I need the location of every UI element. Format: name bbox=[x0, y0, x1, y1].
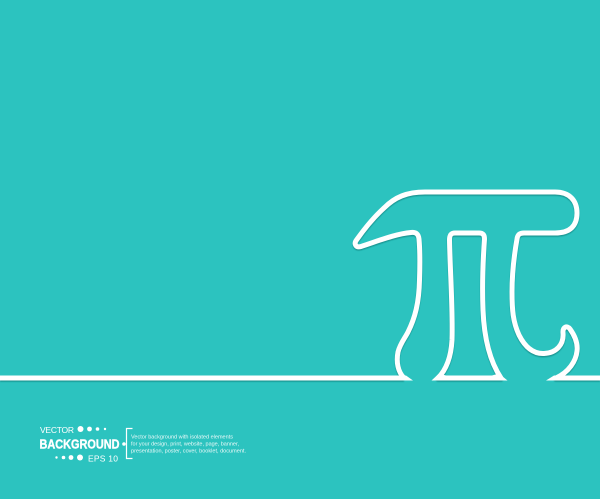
dots row bottom bbox=[55, 454, 83, 460]
description text: presentation, poster, cover, booklet, document. bbox=[131, 448, 246, 454]
tapered tips where the line meets the baseline bbox=[400, 374, 562, 380]
label: BACKGROUND: BACKGROUND bbox=[40, 436, 120, 452]
description text: Vector background with isolated elements bbox=[131, 434, 233, 440]
bracket with pointer bbox=[122, 428, 132, 458]
description text: for your design, print, website, page, banner, bbox=[131, 442, 239, 448]
label: EPS 10: EPS 10 bbox=[88, 454, 118, 464]
shadow of the line art bbox=[0, 193, 600, 379]
line art: pi symbol on baseline bbox=[0, 192, 600, 380]
dots row top bbox=[78, 426, 106, 432]
white outline of pi and baseline bbox=[0, 192, 600, 378]
label: VECTOR: VECTOR bbox=[40, 425, 74, 435]
description text bbox=[131, 434, 246, 454]
logo block: vector background bbox=[40, 425, 246, 464]
